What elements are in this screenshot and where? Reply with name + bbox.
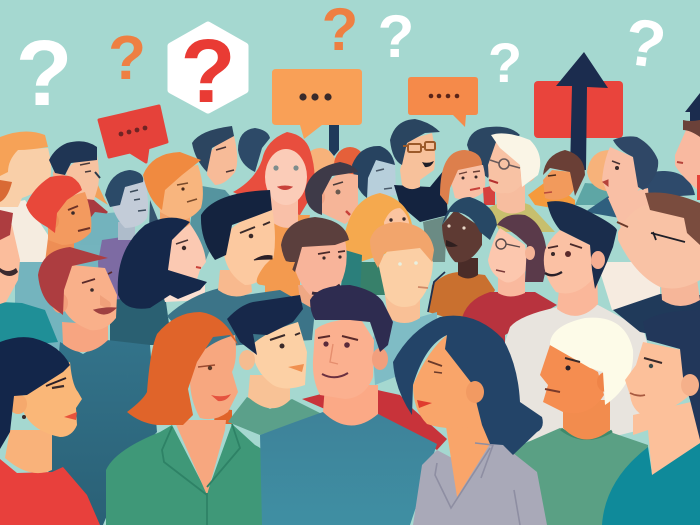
question mark: white middle: ? — [488, 31, 522, 94]
person: brown hair figure at right edge — [675, 120, 700, 200]
person: big dark hair man in teal — [167, 190, 315, 350]
arrow: dark at right edge — [685, 93, 700, 125]
person: brown hair man with beard — [265, 217, 362, 310]
person: red hair man in orange skin — [26, 176, 91, 262]
question mark: large white left: ? — [16, 21, 72, 125]
person: grey blue skin man in purple — [98, 170, 148, 300]
person: left edge man in teal — [0, 210, 58, 348]
person: woman with black hair in red shirt — [0, 337, 100, 525]
question mark: white right: ? — [620, 4, 670, 82]
person: yellow hair woman — [342, 193, 412, 295]
sign: red board with dark up arrow — [534, 52, 623, 170]
person: peach hair behind — [575, 150, 625, 218]
speech bubble: red tilted — [99, 106, 167, 162]
person: man with navy hair in blue shirt — [260, 285, 437, 525]
sign post: behind orange bubble — [329, 122, 339, 156]
person: man with orange glasses in black shirt — [390, 119, 448, 222]
person: yellow orange shirt behind — [528, 180, 575, 212]
person: woman long navy hair — [110, 218, 207, 345]
person: white hair woman with glasses — [483, 133, 555, 232]
person: peach and red shoulders back — [304, 147, 366, 183]
person: blue grey skin woman navy hair — [352, 146, 396, 198]
person: teal shirt behind red hair man — [80, 212, 120, 245]
person: red shirt behind middle front — [302, 389, 447, 450]
person: navy hair woman looking left — [602, 136, 658, 232]
person: man with glasses in navy shirt — [613, 192, 700, 345]
person: man with dark hair in teal shirt — [602, 310, 700, 525]
person: dark hair woman in red — [461, 214, 557, 345]
person: red long hair woman — [233, 132, 315, 262]
person: teal grey shoulder — [423, 216, 447, 262]
person: dark hair woman with brown skin tone — [305, 162, 358, 224]
person: orange hair woman in green blouse — [106, 312, 288, 525]
person: orange hair man with orange skin — [143, 152, 203, 262]
person: woman behind white hair — [467, 127, 520, 178]
person: dark hair man in teal — [190, 126, 237, 262]
person: woman with wavy navy hair in grey blouse — [393, 316, 547, 525]
person: back navy hair head — [238, 128, 270, 172]
person: red hair man in dark teal — [38, 247, 157, 525]
speech bubble: large orange — [272, 69, 362, 139]
person: man with white cap in green shirt — [512, 318, 650, 525]
person: blond man in light teal — [370, 222, 437, 385]
person: navy hair man with orange tie — [49, 141, 108, 220]
person: back navy hair head right — [640, 171, 695, 198]
person: brown hair man — [543, 150, 585, 200]
person: dark skinned woman in orange — [428, 197, 497, 322]
person: dark hair man in green shirt — [227, 295, 322, 435]
icon: white hexagon with red question mark: ? — [181, 22, 235, 122]
person: man in white shirt with navy hair — [505, 201, 660, 450]
speech bubble: small orange — [408, 77, 478, 127]
crowd — [0, 119, 700, 525]
question mark: orange left: ? — [108, 24, 146, 93]
back fill behind the crowd — [15, 212, 150, 350]
question mark: white top: ? — [378, 3, 414, 70]
person: orange hair man top left — [0, 131, 51, 262]
person: orange hair man — [440, 150, 485, 205]
